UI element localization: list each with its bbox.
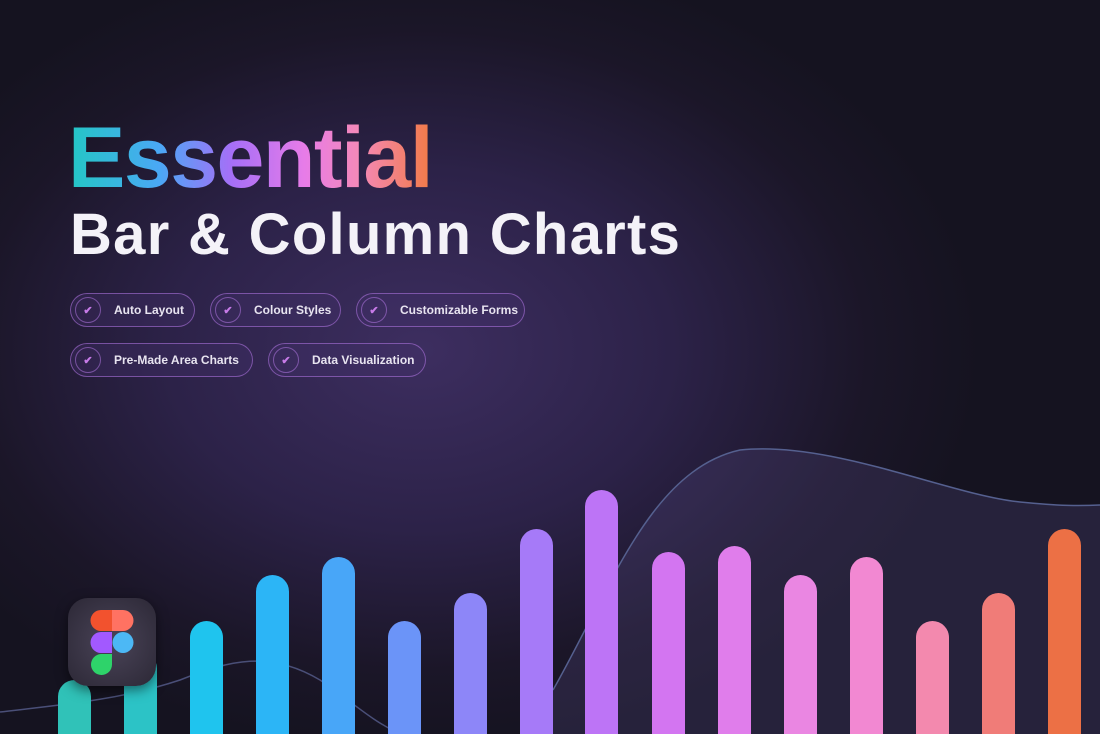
pill: Auto Layout: Auto Layout (114, 303, 184, 317)
pill: Colour Styles: ✔ (223, 304, 233, 316)
icon: figma app (68, 598, 156, 686)
subtitle: Bar & Column Charts (70, 202, 681, 267)
pill: Pre-Made Area Charts: Pre-Made Area Charts (114, 353, 239, 367)
pill: Customizable Forms (356, 293, 525, 327)
title: Essential: Essential (68, 110, 432, 206)
pill: Colour Styles (210, 293, 341, 327)
pill: Customizable Forms: ✔ (369, 304, 379, 316)
pill: Data Visualization: Data Visualization (312, 353, 414, 367)
pill: Data Visualization: ✔ (281, 354, 291, 366)
pill: Customizable Forms: Customizable Forms (400, 303, 518, 317)
pill: Data Visualization (268, 343, 426, 377)
pill: Pre-Made Area Charts: ✔ (83, 354, 93, 366)
pill: Pre-Made Area Charts (70, 343, 253, 377)
pill: Auto Layout (70, 293, 195, 327)
pill: Colour Styles: Colour Styles (254, 303, 331, 317)
pill: Auto Layout: ✔ (83, 304, 93, 316)
